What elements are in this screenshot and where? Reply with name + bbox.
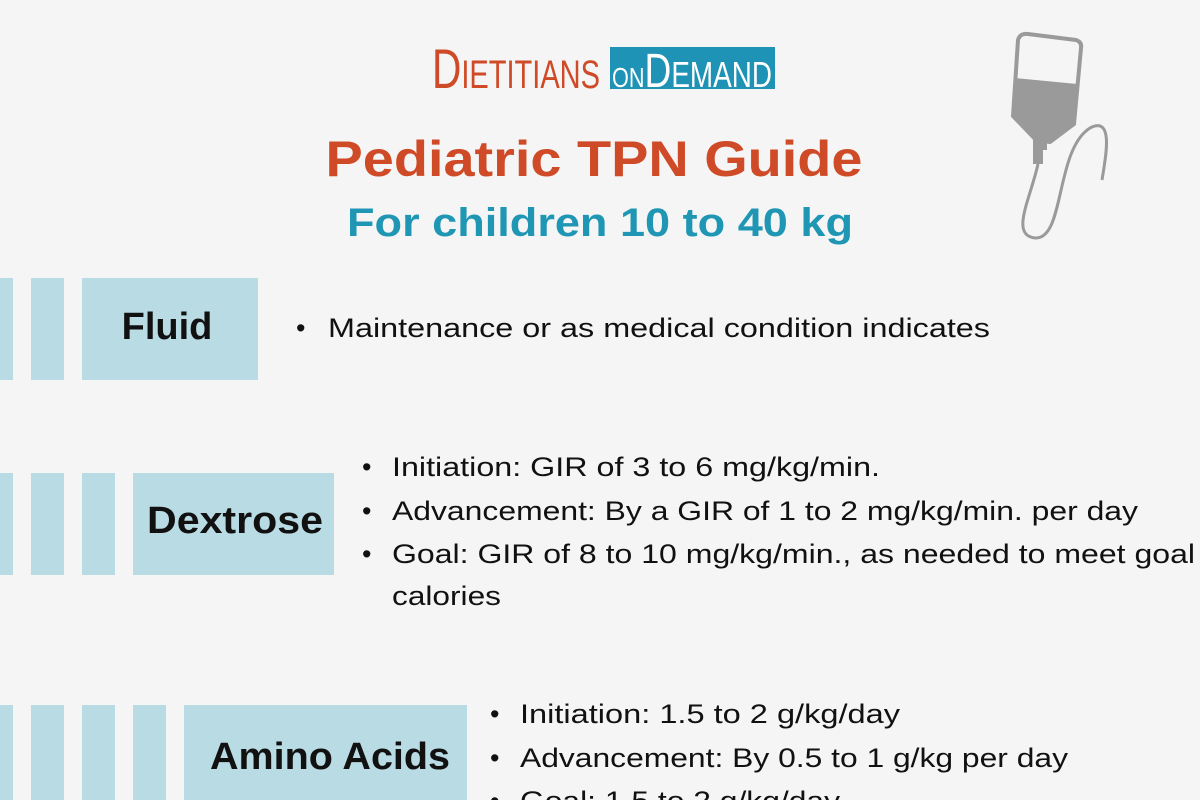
panel: dextrose: Initiation: GIR of 3 to 6 mg/kg/min. — [392, 452, 880, 482]
panel: dextrose: Goal: GIR of 8 to 10 mg/kg/min., as needed to meet goal — [392, 539, 1195, 569]
panel: amino acids: Amino Acids — [210, 736, 450, 778]
panel: dextrose — [0, 452, 1195, 611]
panel: dextrose: calories — [392, 581, 501, 611]
logo — [432, 37, 775, 100]
panel: dextrose: • — [362, 452, 371, 482]
panel: dextrose: • — [362, 496, 371, 526]
panel: amino acids: Advancement: By 0.5 to 1 g/kg per day — [520, 743, 1069, 773]
panel: dextrose: Advancement: By a GIR of 1 to 2 mg/kg/min. per day — [392, 496, 1139, 526]
panel: fluid: • — [296, 313, 305, 343]
title: Pediatric TPN Guide — [326, 131, 862, 187]
logo: DIETITIANS — [432, 37, 600, 100]
logo: ONDEMAND — [612, 45, 772, 98]
panel: fluid: Fluid — [122, 306, 212, 348]
panel: fluid — [0, 278, 990, 380]
panel: amino acids: • — [490, 699, 499, 729]
panel: dextrose: • — [362, 539, 371, 569]
panel: amino acids: Initiation: 1.5 to 2 g/kg/day — [520, 699, 901, 729]
subtitle: For children 10 to 40 kg — [347, 201, 853, 245]
icon: IV bag — [1013, 34, 1107, 238]
panel: amino acids: • — [490, 743, 499, 773]
panel: amino acids — [0, 699, 1069, 800]
panel: dextrose: Dextrose — [147, 500, 323, 542]
panel: fluid: Maintenance or as medical condition indicates — [328, 313, 990, 343]
